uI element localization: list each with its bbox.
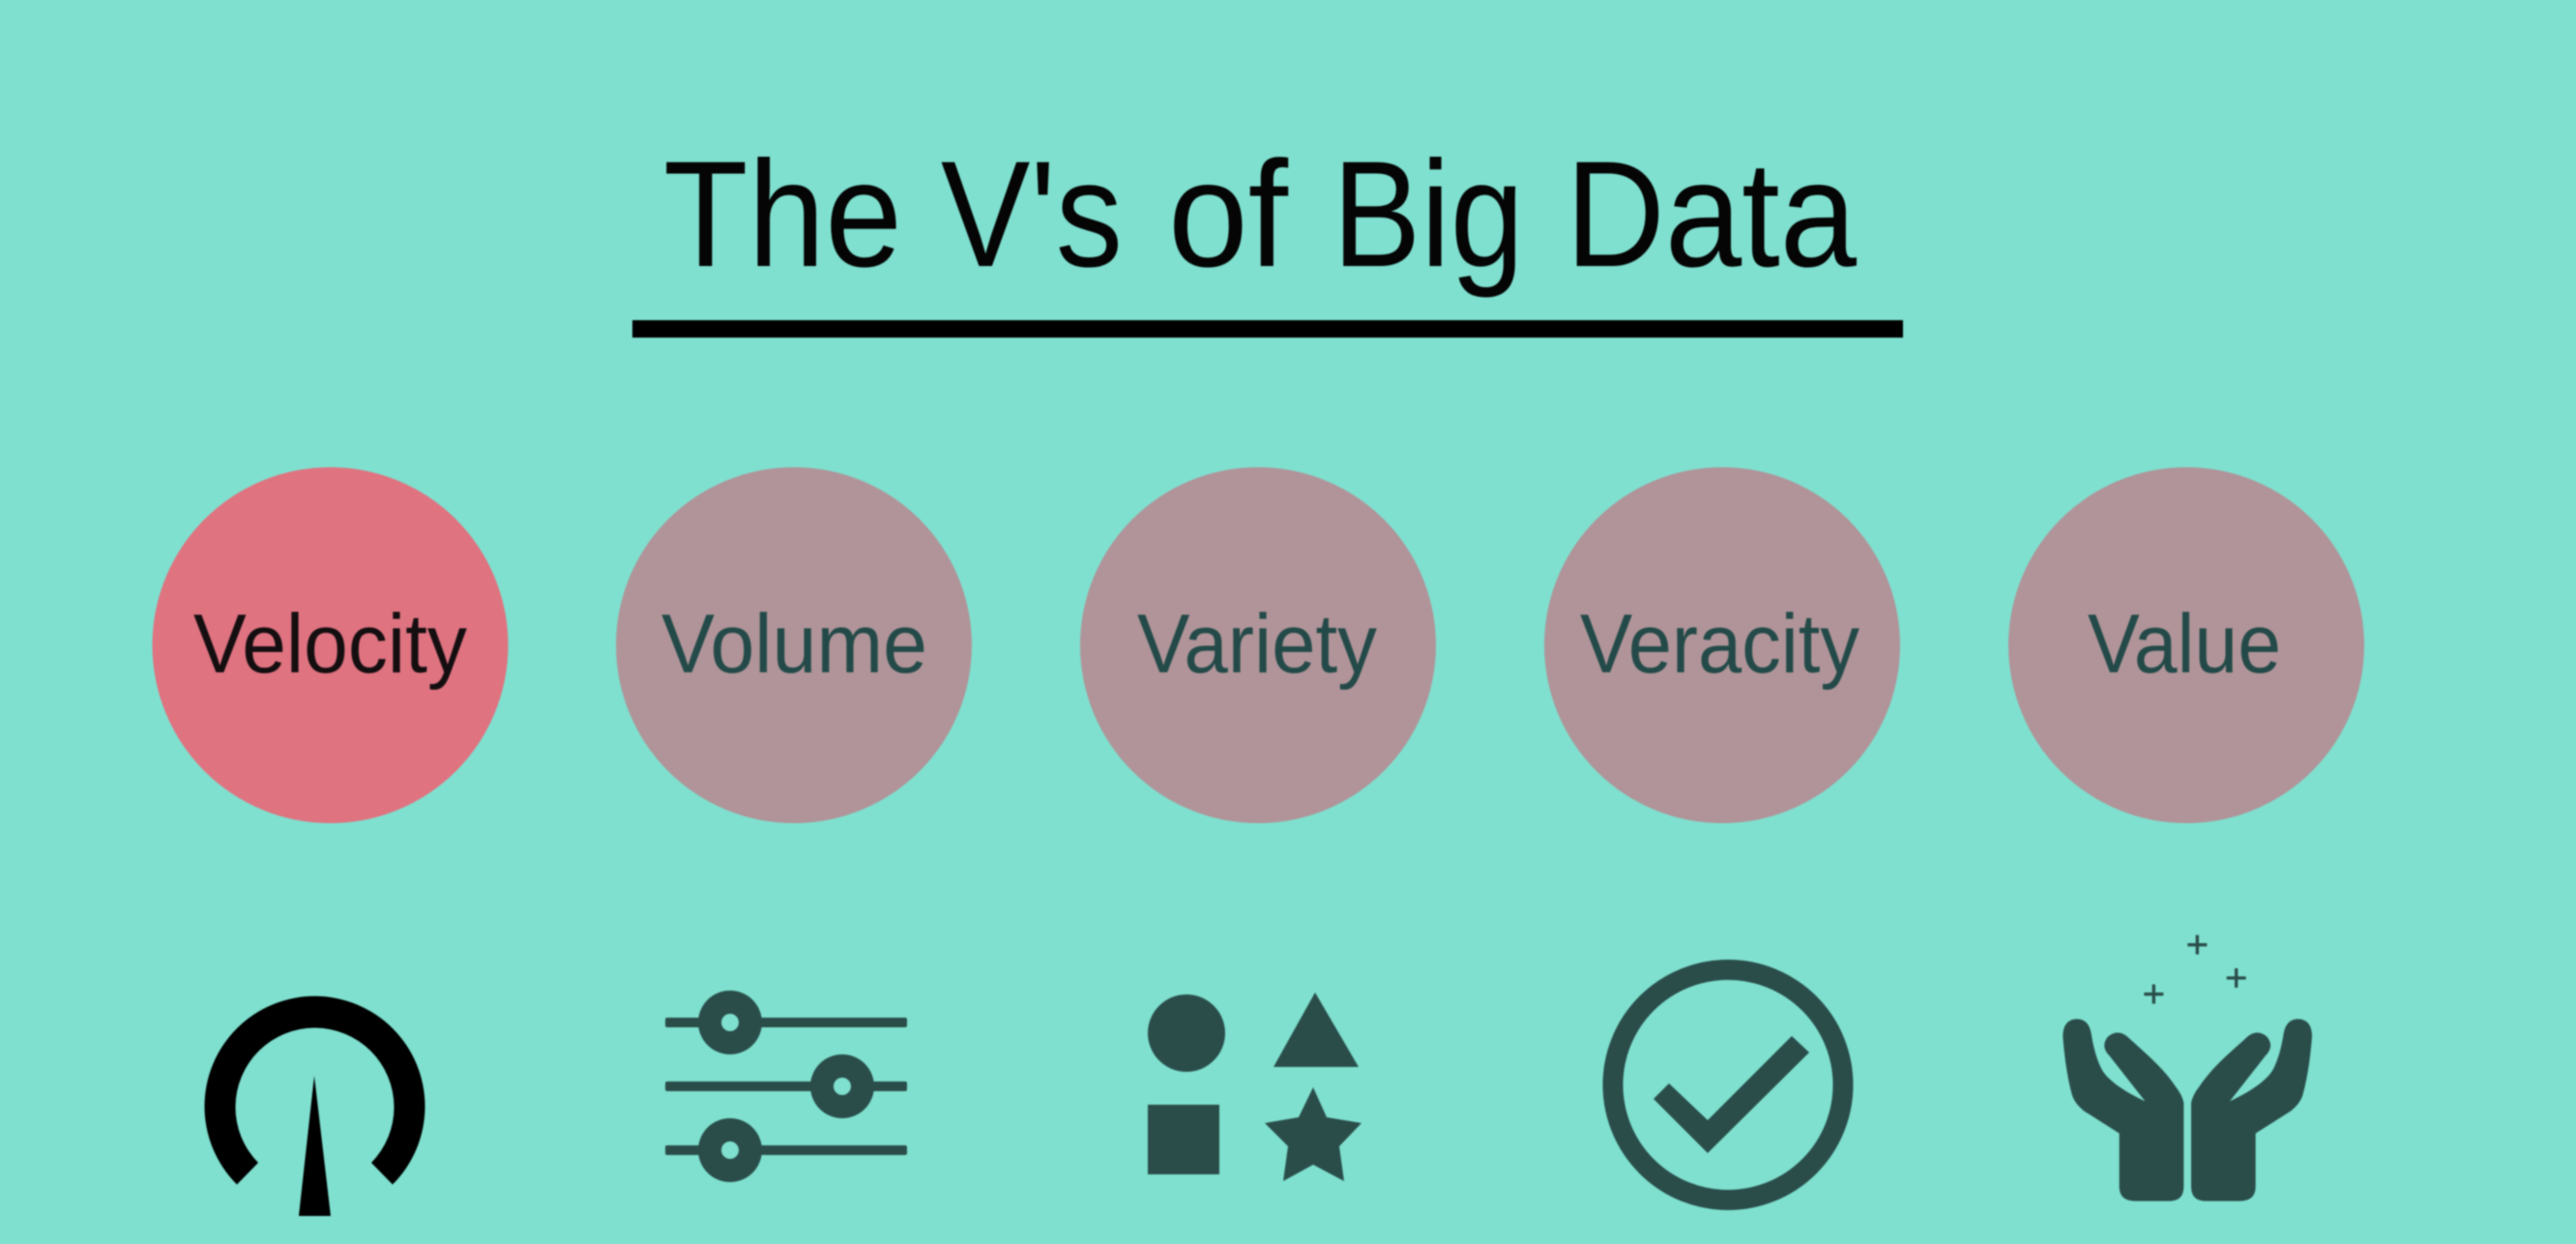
icon: open hands with sparkles bbox=[2063, 935, 2312, 1201]
icon: shapes bbox=[1148, 992, 1361, 1181]
circle: Value: Value bbox=[2088, 598, 2281, 691]
icon: sliders bbox=[665, 991, 907, 1182]
title: V's bbox=[941, 131, 1123, 299]
circle: Value bbox=[2008, 467, 2364, 823]
title: Big bbox=[1332, 131, 1524, 299]
title: The bbox=[663, 131, 902, 299]
circle: Volume bbox=[616, 467, 972, 823]
circle: Volume: Volume bbox=[661, 598, 927, 691]
icon: speedometer gauge bbox=[204, 996, 425, 1216]
circle: Veracity: Veracity bbox=[1580, 598, 1859, 691]
circle: Variety: Variety bbox=[1137, 598, 1377, 691]
circle: Velocity: Velocity bbox=[193, 598, 467, 691]
circle: Velocity bbox=[153, 467, 509, 823]
icon: check mark in circle bbox=[1613, 969, 1843, 1200]
title bbox=[632, 131, 1903, 338]
circle: Veracity bbox=[1544, 467, 1900, 823]
title: of bbox=[1168, 131, 1289, 299]
circle: Variety bbox=[1080, 467, 1436, 823]
title: Data bbox=[1566, 131, 1857, 299]
